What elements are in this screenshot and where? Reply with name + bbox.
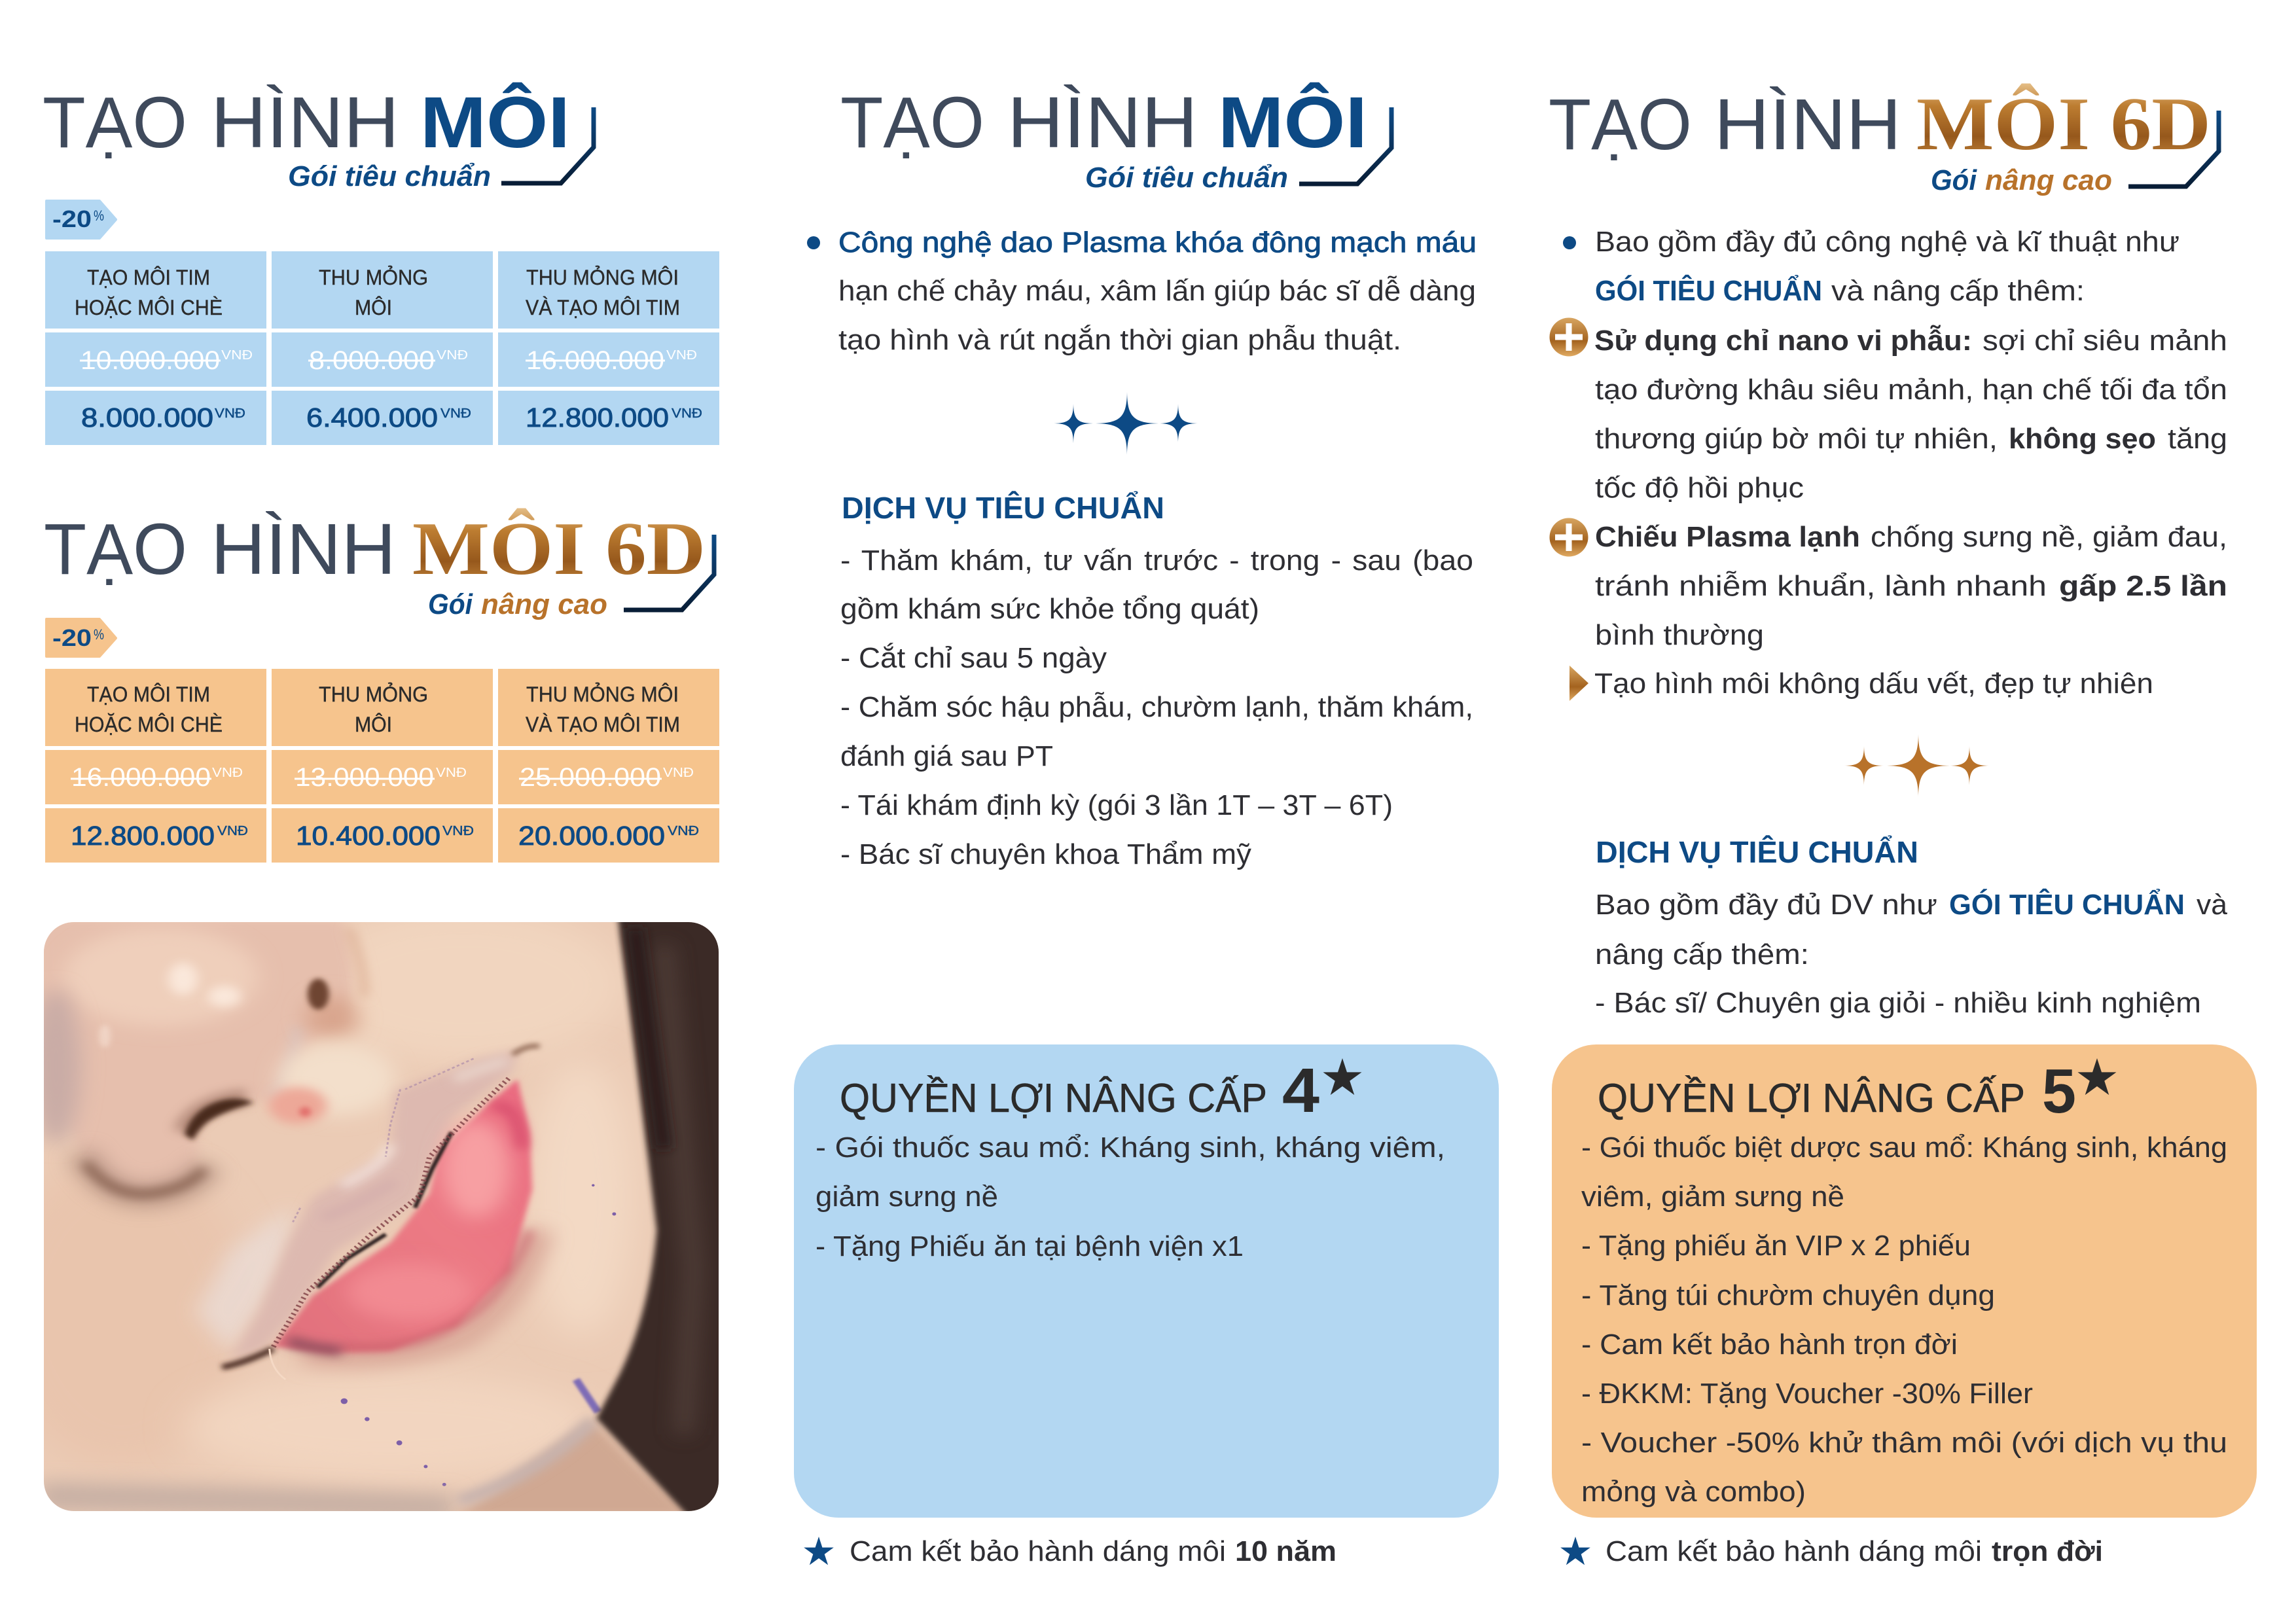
title: Tạo hình môi 6D [44,507,706,590]
table row: discounted prices: VNĐ [672,406,702,421]
benefit: nano thread: tạo đường khâu siêu mảnh, hạn chế tối đa tổn [1595,374,2227,406]
panel: 5-star upgrade benefits: - Gói thuốc biệt dược sau mổ: Kháng sinh, kháng [1581,1132,2227,1164]
services list: gồm khám sức khỏe tổng quát) [840,593,1259,625]
table row: original prices: VNĐ [663,766,694,780]
title: Tạo hình môi 6D: HÌNH [1714,84,1901,165]
table row: original prices: VNĐ [212,766,243,780]
title bracket [624,535,714,610]
discount badge: % [94,626,104,643]
title: Tạo hình môi 6D [1549,82,2211,166]
table row: original prices [45,332,719,387]
icon: plus [1550,318,1588,356]
table row: discounted prices: VNĐ [217,824,248,838]
panel: 4-star upgrade benefits: - Tặng Phiếu ăn tại bệnh viện x1 [816,1230,1244,1262]
technology text block: hạn chế chảy máu, xâm lấn giúp bác sĩ dễ dàng [838,275,1476,307]
column: 6D package details [1549,82,2257,1567]
table row: discounted prices [45,808,719,863]
table row: discounted prices: VNĐ [668,824,699,838]
photo: lips after surgery [44,922,719,1511]
benefit: nano thread: sợi chỉ siêu mảnh [1982,325,2227,357]
table row: original prices: 16.000.000 [71,763,211,792]
benefit: cold plasma: chống sưng nề, giảm đau, [1871,521,2227,553]
benefit: cold plasma: bình thường [1595,619,1764,651]
title: Tạo hình môi: HÌNH [211,82,399,163]
services list: đánh giá sau PT [840,740,1053,772]
warranty note: 10 năm [1235,1535,1336,1567]
table row: discounted prices: 12.800.000 [71,821,215,851]
icon: blue sparkles [1054,392,1198,455]
panel: 6D package pricing [44,507,719,863]
subtitle: nâng cao [1985,164,2112,196]
title: Tạo hình môi: HÌNH [1007,82,1198,163]
discount badge: -20 [52,624,92,651]
technology text block: tạo hình và rút ngắn thời gian phẫu thuật. [838,324,1401,356]
table row: original prices: 16.000.000 [526,346,664,375]
title: Tạo hình môi [840,82,1367,163]
table header row: VÀ TẠO MÔI TIM [526,713,680,736]
subtitle: Gói [428,588,473,620]
panel: 5-star upgrade benefits: - ĐKKM: Tặng Voucher -30% Filler [1581,1378,2033,1410]
table row: original prices: VNĐ [436,766,467,780]
technology intro: GÓI TIÊU CHUẨN [1595,274,1822,307]
benefit: nano thread: tốc độ hồi phục [1595,472,1804,504]
panel: 5-star upgrade benefits [1552,1044,2257,1518]
title bracket [501,107,594,183]
technology intro: Bao gồm đầy đủ công nghệ và kĩ thuật như [1595,226,2179,258]
warranty note: Cam kết bảo hành dáng môi [1605,1535,1982,1567]
table header row: HOẶC MÔI CHÈ [75,713,223,736]
discount badge [46,201,116,238]
benefit: nano thread: thương giúp bờ môi tự nhiên, [1595,423,1998,455]
table row: original prices [45,750,719,804]
panel: 5-star upgrade benefits: - Cam kết bảo hành trọn đời [1581,1329,1958,1361]
warranty note [804,1535,1336,1567]
icon: gold sparkles [1844,734,1989,797]
technology text block [807,226,1477,356]
table row: original prices: 8.000.000 [309,346,435,375]
table row: discounted prices [45,391,719,445]
services list: - Bác sĩ chuyên khoa Thẩm mỹ [840,838,1251,870]
panel: 4-star upgrade benefits: QUYỀN LỢI NÂNG CẤP [840,1076,1267,1121]
services text: nâng cấp thêm: [1595,938,1809,971]
title: Tạo hình môi [43,82,570,163]
title: Tạo hình môi 6D: TẠO [1549,84,1692,165]
subtitle [1931,164,2112,196]
panel: 4-star upgrade benefits: giảm sưng nề [816,1181,998,1213]
services list [840,544,1473,870]
panel: 5-star upgrade benefits: mỏng và combo) [1581,1476,1806,1508]
title: Tạo hình môi: TẠO [43,82,187,163]
panel: 5-star upgrade benefits: viêm, giảm sưng nề [1581,1181,1844,1213]
benefit: nano thread: không sẹo [2009,423,2156,455]
title: Tạo hình môi 6D: TẠO [44,509,187,590]
benefit: cold plasma: tránh nhiễm khuẩn, lành nhanh [1595,570,2047,602]
table row: discounted prices: 12.800.000 [526,402,669,433]
heading: standard services: DỊCH VỤ TIÊU CHUẨN [1596,835,1918,869]
heading: standard services: DỊCH VỤ TIÊU CHUẨN [842,491,1164,525]
table header row: THU MỎNG [319,683,428,706]
table row: original prices: 13.000.000 [295,763,434,792]
services list: - Thăm khám, tư vấn trước - trong - sau (bao [840,544,1473,577]
warranty note: trọn đời [1992,1535,2103,1567]
title bracket [1299,107,1391,184]
title: Tạo hình môi: MÔI [1218,82,1367,163]
table header row: THU MỎNG MÔI [526,683,679,706]
benefit: nano thread: tăng [2168,423,2227,455]
subtitle: Gói tiêu chuẩn [1085,162,1288,194]
technology intro: và nâng cấp thêm: [1831,275,2085,307]
discount badge: % [94,207,104,224]
subtitle: Gói tiêu chuẩn [288,160,491,192]
services text: và [2197,889,2228,921]
table row: original prices: VNĐ [221,348,253,363]
services text [1595,887,2228,1019]
table row: discounted prices: VNĐ [442,824,474,838]
subtitle: nâng cao [481,588,607,620]
benefit: cold plasma [1550,518,2227,651]
icon: plus [1550,518,1588,556]
panel: standard package pricing [43,82,719,445]
benefit: nano thread: Sử dụng chỉ nano vi phẫu: [1594,324,1972,357]
panel: 4-star upgrade benefits: - Gói thuốc sau mổ: Kháng sinh, kháng viêm, [816,1132,1445,1164]
table row: discounted prices: VNĐ [215,406,245,421]
panel: 5-star upgrade benefits: - Voucher -50% khử thâm môi (với dịch vụ thu [1581,1427,2227,1459]
panel: 5-star upgrade benefits: - Tăng túi chườm chuyên dụng [1581,1279,1995,1311]
discount badge [46,619,116,656]
title: Tạo hình môi 6D: MÔI 6D [1916,82,2211,166]
services list: - Chăm sóc hậu phẫu, chườm lạnh, thăm khám, [840,691,1473,723]
table row: discounted prices: 10.400.000 [296,821,440,851]
table header row: MÔI [355,296,392,319]
services text: Bao gồm đầy đủ DV như [1595,889,1937,921]
table row: discounted prices: 20.000.000 [518,821,665,851]
table header row: THU MỎNG MÔI [526,266,679,289]
benefit: cold plasma: gấp 2.5 lần [2059,570,2227,602]
panel: 5-star upgrade benefits: QUYỀN LỢI NÂNG CẤP [1598,1076,2025,1121]
warranty note: Cam kết bảo hành dáng môi [850,1535,1226,1567]
table header row: MÔI [355,713,392,736]
services text: GÓI TIÊU CHUẨN [1949,887,2185,921]
table row: original prices: 10.000.000 [81,346,220,375]
table header row: HOẶC MÔI CHÈ [75,296,223,319]
table row: original prices: VNĐ [666,348,697,363]
table header row: TẠO MÔI TIM [87,266,210,289]
services list: - Cắt chỉ sau 5 ngày [840,642,1107,674]
title bracket [2128,111,2219,187]
table header row: THU MỎNG [319,266,428,289]
benefit: cold plasma: Chiếu Plasma lạnh [1595,521,1860,553]
benefit: nano thread [1550,318,2227,504]
panel: 4-star upgrade benefits: 4 [1282,1056,1319,1126]
title: Tạo hình môi 6D: HÌNH [211,509,396,590]
discount badge: -20 [52,205,92,232]
technology intro [1563,226,2179,307]
subtitle: Gói [1931,164,1977,196]
table header row [45,251,719,329]
table row: discounted prices: 6.400.000 [306,402,438,433]
panel: 5-star upgrade benefits: 5 [2042,1056,2076,1126]
table header row: VÀ TẠO MÔI TIM [526,296,680,319]
table row: original prices: 25.000.000 [520,763,661,792]
panel: 4-star upgrade benefits [794,1044,1499,1518]
title: Tạo hình môi: TẠO [840,82,984,163]
column: standard package details [794,82,1499,1567]
title: Tạo hình môi 6D: MÔI 6D [412,507,706,590]
warranty note [1560,1535,2103,1567]
services text: - Bác sĩ/ Chuyên gia giỏi - nhiều kinh nghiệm [1595,987,2201,1019]
table header row [45,669,719,746]
benefit: natural result: Tạo hình môi không dấu vết, đẹp tự nhiên [1594,668,2153,700]
services list: - Tái khám định kỳ (gói 3 lần 1T – 3T – 6T) [840,789,1393,821]
table row: original prices: VNĐ [437,348,468,363]
title: Tạo hình môi: MÔI [420,82,570,163]
technology text block: Công nghệ dao Plasma khóa đông mạch máu [838,226,1477,259]
table row: discounted prices: VNĐ [440,406,471,421]
panel: 5-star upgrade benefits: - Tặng phiếu ăn VIP x 2 phiếu [1581,1230,1971,1262]
table header row: TẠO MÔI TIM [87,683,210,706]
table row: discounted prices: 8.000.000 [81,402,213,433]
